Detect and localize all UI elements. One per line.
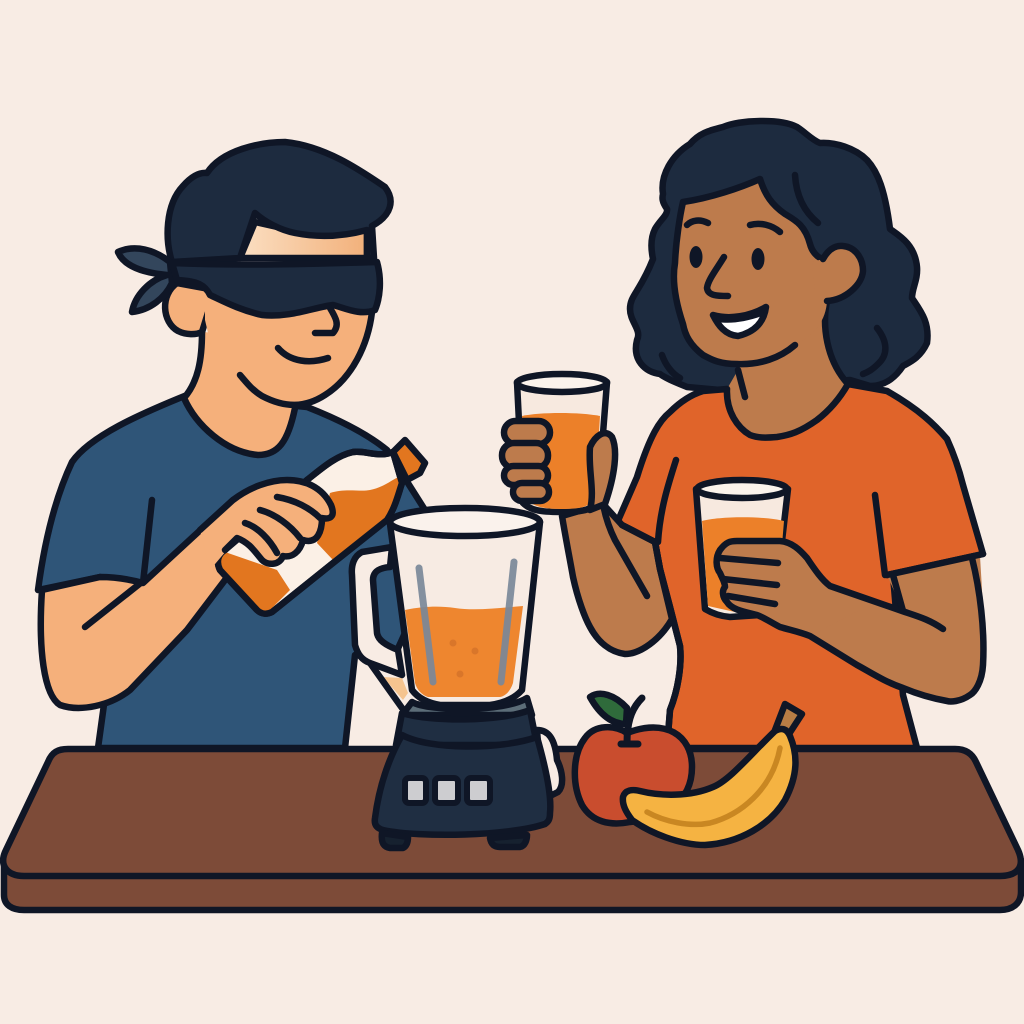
- apple: [575, 694, 692, 823]
- raised glass body: [517, 382, 607, 512]
- woman shirt: [617, 384, 983, 748]
- bottle outline: [218, 452, 402, 614]
- woman nose: [707, 257, 728, 296]
- man shirt: [38, 395, 425, 748]
- blender handle: [352, 547, 402, 675]
- glass: raised: [517, 374, 607, 512]
- blender jar: [390, 522, 540, 705]
- woman right fingers: [720, 558, 778, 604]
- held glass rim: [697, 480, 787, 498]
- woman raised thumb: [590, 433, 615, 510]
- blender rods: [419, 562, 514, 682]
- woman eyes: [690, 246, 764, 270]
- banana body: [623, 729, 795, 845]
- held glass juice: [702, 517, 784, 612]
- man ear: [165, 283, 215, 334]
- glass: held: [696, 480, 788, 617]
- woman left sleeve crease: [658, 460, 676, 542]
- woman hair strand right: [863, 328, 885, 374]
- apple leaf: [590, 694, 627, 724]
- woman raised arm inner line: [603, 504, 647, 596]
- table: [3, 749, 1021, 910]
- bottle: [218, 440, 425, 614]
- bottle body: [218, 452, 402, 614]
- man forehead: [240, 222, 367, 258]
- bottle cap: [393, 440, 425, 480]
- man hand: [200, 480, 333, 570]
- held glass body: [696, 489, 788, 617]
- skin patch behind blender: [383, 677, 408, 700]
- woman face: [674, 179, 840, 364]
- woman right hand: [717, 541, 860, 636]
- blender: [352, 508, 562, 848]
- table front edge: [4, 860, 1021, 910]
- man arm: [41, 500, 300, 708]
- blindfold: [172, 262, 380, 316]
- woman right arm line under sleeve: [893, 575, 903, 611]
- blender collar: [396, 710, 537, 745]
- man nose: [315, 308, 337, 333]
- man hand outline: [200, 480, 333, 564]
- man hair: [168, 142, 391, 262]
- raised glass juice: [522, 413, 600, 509]
- woman brows: [687, 221, 780, 232]
- bottle juice upper: [317, 476, 400, 560]
- apple body: [575, 727, 692, 823]
- banana: [623, 704, 802, 845]
- woman face outline: [674, 179, 823, 364]
- blender grey collar band: [402, 698, 532, 715]
- man sleeve crease: [143, 500, 152, 583]
- apple stem: [621, 698, 642, 744]
- woman raised fingers: [502, 421, 550, 501]
- blender liquid: [405, 606, 523, 697]
- woman raised arm: [562, 504, 672, 654]
- man jaw line: [240, 312, 372, 405]
- man arm line: [85, 578, 147, 627]
- man face: [205, 265, 372, 405]
- woman ear outline: [823, 246, 863, 301]
- man smile: [278, 348, 328, 361]
- woman right hand outline: [717, 541, 983, 701]
- woman hair strand left: [662, 355, 680, 378]
- blender buttons: [405, 778, 490, 803]
- woman right arm: [717, 541, 984, 701]
- banana stem: [775, 704, 802, 734]
- woman neck line: [825, 301, 848, 384]
- woman torso edge: [655, 542, 681, 748]
- woman hair strand top: [795, 175, 818, 223]
- table top: [3, 749, 1021, 876]
- person: woman: [502, 121, 984, 748]
- woman hair: [630, 121, 928, 390]
- woman mouth upper band: [713, 307, 766, 323]
- woman ear: [812, 246, 863, 301]
- blender feet: [382, 833, 527, 848]
- person: blindfolded man: [38, 142, 425, 748]
- blender base: [375, 735, 550, 835]
- woman right sleeve crease: [875, 495, 885, 575]
- blender side dial: [537, 730, 562, 797]
- man collar: [184, 332, 295, 455]
- raised glass rim: [517, 374, 607, 392]
- man neck: [184, 332, 330, 455]
- bottle juice lower: [220, 552, 290, 612]
- woman neck: [727, 285, 848, 437]
- blender support line: [370, 663, 402, 708]
- man fingers: [245, 497, 320, 553]
- woman sleeve hem left: [622, 525, 655, 542]
- woman mouth: [713, 307, 766, 336]
- blindfold knot: [118, 248, 172, 312]
- blender pulp specks: [450, 640, 478, 678]
- banana stripe: [647, 748, 780, 824]
- woman neck crease: [738, 370, 745, 397]
- woman sleeve hem right: [887, 554, 983, 575]
- blender jar rim: [390, 508, 540, 536]
